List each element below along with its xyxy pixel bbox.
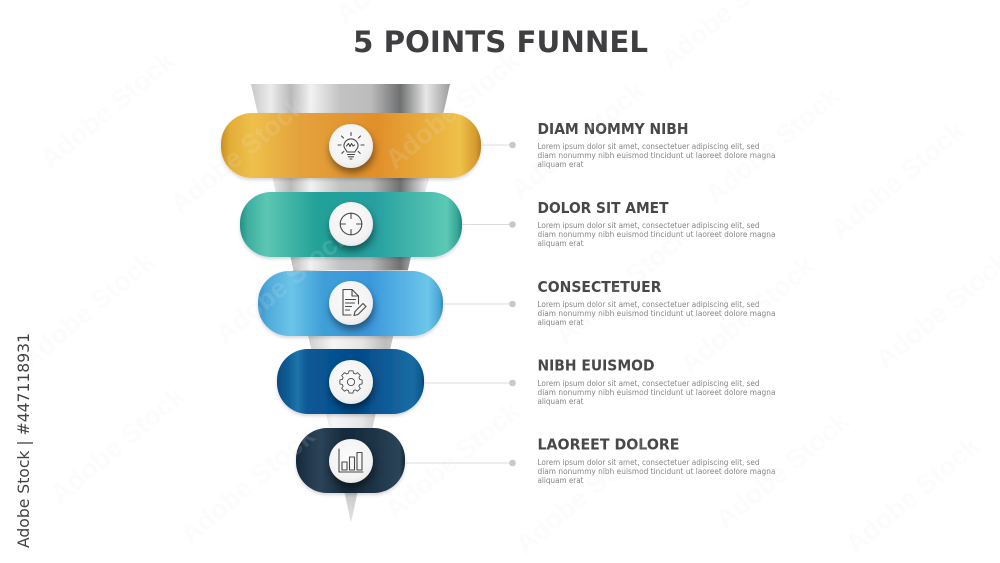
stock watermark pattern: Adobe Stock [165, 90, 311, 220]
text block 3: aliquam erat [538, 318, 584, 327]
text block 2: diam nonummy nibh euismod tincidunt ut laoreet dolore magna [538, 230, 776, 239]
text block 1: DIAM NOMMY NIBH [538, 120, 688, 138]
text block 5 [538, 436, 776, 485]
icon 2: target crosshair [329, 202, 373, 246]
text block 5: diam nonummy nibh euismod tincidunt ut laoreet dolore magna [538, 467, 776, 476]
stock watermark pattern: Adobe Stock [175, 420, 321, 550]
funnel cone [251, 84, 450, 522]
text block 1: aliquam erat [538, 160, 584, 169]
text block 4: aliquam erat [538, 397, 584, 406]
text block 4 [538, 356, 776, 406]
text block 4: diam nonummy nibh euismod tincidunt ut laoreet dolore magna [538, 388, 776, 397]
pill 4: deep blue [277, 349, 424, 414]
icon 1: light bulb [329, 124, 373, 168]
text block 4: NIBH EUISMOD [538, 356, 655, 374]
text block 1: diam nonummy nibh euismod tincidunt ut laoreet dolore magna [538, 151, 776, 160]
icon 3: document with pencil [329, 281, 373, 325]
pill 3: sky blue [258, 271, 443, 336]
connector 3 [443, 301, 516, 307]
stock watermark pattern: Adobe Stock [825, 115, 971, 245]
text block 2: aliquam erat [538, 239, 584, 248]
stock watermark pattern: Adobe Stock [840, 430, 986, 560]
connector 2 [462, 221, 516, 228]
text block 5: aliquam erat [538, 476, 584, 485]
text block 1: Lorem ipsum dolor sit amet, consectetuer adipiscing elit, sed [538, 142, 760, 151]
stock watermark pattern: Adobe Stock [710, 405, 856, 535]
connector 1 [481, 142, 516, 148]
text block 3: Lorem ipsum dolor sit amet, consectetuer adipiscing elit, sed [538, 300, 760, 309]
pill 1: amber [221, 113, 481, 178]
stock watermark pattern: Adobe Stock [380, 45, 526, 175]
stock watermark pattern: Adobe Stock [380, 395, 526, 525]
text block 5: Lorem ipsum dolor sit amet, consectetuer adipiscing elit, sed [538, 458, 760, 467]
pill 5: navy [296, 428, 405, 493]
pill 2: teal [240, 192, 462, 257]
icon 5: bar chart [329, 439, 373, 483]
connector 4 [424, 380, 516, 386]
text block 3: CONSECTETUER [538, 278, 662, 296]
text block 3: diam nonummy nibh euismod tincidunt ut laoreet dolore magna [538, 309, 776, 318]
stock watermark pattern: Adobe Stock [505, 75, 651, 205]
stock watermark pattern: Adobe Stock [35, 45, 181, 175]
stock watermark pattern: Adobe Stock [45, 380, 191, 510]
connector 5 [405, 460, 516, 466]
text block 2: DOLOR SIT AMET [538, 199, 669, 217]
text block 3 [538, 278, 776, 327]
title: 5 POINTS FUNNEL [353, 25, 648, 59]
text block 2 [538, 199, 776, 248]
text block 1 [538, 120, 776, 169]
stock id side label: Adobe Stock | #447118931 [14, 333, 33, 548]
text block 4: Lorem ipsum dolor sit amet, consectetuer adipiscing elit, sed [538, 379, 760, 388]
stock watermark pattern: Adobe Stock [15, 245, 161, 375]
stock watermark pattern: Adobe Stock [675, 250, 821, 380]
stock watermark pattern: Adobe Stock [700, 80, 846, 210]
text block 5: LAOREET DOLORE [538, 436, 680, 454]
stock watermark pattern: Adobe Stock [550, 220, 696, 350]
icon 4: gear [329, 360, 373, 404]
text block 2: Lorem ipsum dolor sit amet, consectetuer adipiscing elit, sed [538, 221, 760, 230]
stock watermark pattern: Adobe Stock [210, 220, 356, 350]
stock watermark pattern: Adobe Stock [510, 430, 656, 560]
